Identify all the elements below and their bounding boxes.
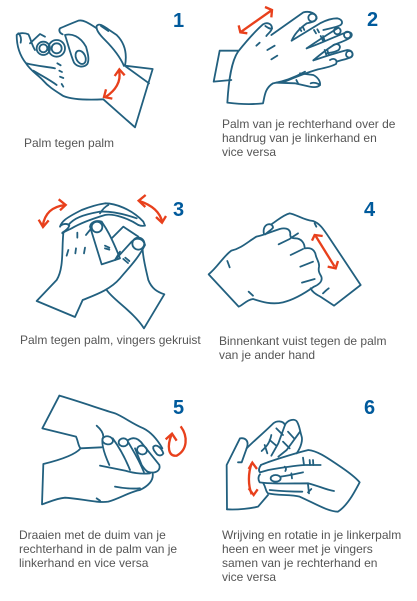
- caption 1: Palm tegen palm: [24, 136, 114, 150]
- caption 6: vice versa: [222, 570, 276, 584]
- caption 6: Wrijving en rotatie in je linkerpalm: [222, 528, 401, 542]
- illustration 1: palm against palm: [17, 20, 153, 127]
- caption 5: rechterhand in de palm van je: [19, 542, 177, 556]
- caption 6: samen van je rechterhand en: [222, 556, 377, 570]
- caption 2: Palm van je rechterhand over de: [222, 117, 395, 131]
- number 1: 1: [173, 10, 184, 32]
- caption 3: Palm tegen palm, vingers gekruist: [20, 333, 201, 347]
- caption 4: [219, 334, 386, 362]
- caption 5: Draaien met de duim van je: [19, 528, 166, 542]
- number 4: 4: [364, 199, 376, 221]
- caption 5: linkerhand en vice versa: [19, 556, 148, 570]
- caption 6: [222, 528, 401, 584]
- illustration 4: fist against palm: [209, 213, 361, 307]
- caption 2: vice versa: [222, 145, 276, 159]
- caption 2: handrug van je linkerhand en: [222, 131, 377, 145]
- number 5: 5: [173, 397, 184, 419]
- caption 4: van je ander hand: [219, 348, 315, 362]
- illustration 5: thumb rotating in palm: [42, 396, 186, 504]
- number 6: 6: [364, 397, 375, 419]
- illustration 6: fingers rotating in palm: [227, 420, 360, 512]
- number 2: 2: [367, 9, 378, 31]
- illustration 3: palm to palm with crossed fingers: [37, 195, 166, 328]
- caption 2: [222, 117, 395, 159]
- illustration 2: palm over back of hand: [214, 7, 353, 104]
- number 3: 3: [173, 199, 184, 221]
- caption 5: [19, 528, 177, 570]
- caption 4: Binnenkant vuist tegen de palm: [219, 334, 386, 348]
- caption 6: heen en weer met je vingers: [222, 542, 373, 556]
